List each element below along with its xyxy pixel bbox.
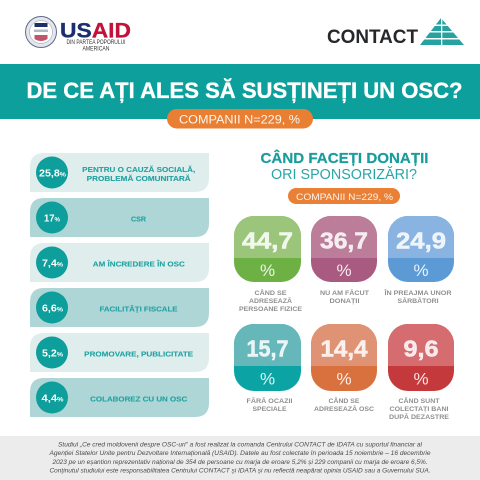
row: încredere: 7,4% xyxy=(42,258,63,270)
card: persoane fizice: % xyxy=(260,261,275,280)
row: colaborez: COLABOREZ CU UN OSC xyxy=(90,394,188,404)
heading: donations: ORI SPONSORIZĂRI? xyxy=(271,166,417,183)
card: după dezastre: 9,6 xyxy=(404,336,438,362)
row: colaborez xyxy=(30,378,209,417)
card: după dezastre xyxy=(388,324,454,421)
card: persoane fizice: 44,7 xyxy=(242,228,293,254)
row: facilități fiscale: 6,6% xyxy=(42,304,63,314)
panel: donation cards xyxy=(234,216,454,421)
row: CSR xyxy=(30,198,209,237)
row: promovare xyxy=(30,333,209,372)
card: nu am făcut donații: NU AM FĂCUT xyxy=(320,288,370,297)
USAID wordmark: USAID xyxy=(60,20,131,42)
footer note xyxy=(0,436,480,480)
card: după dezastre: % xyxy=(413,370,429,388)
row: CSR: CSR xyxy=(131,214,147,224)
card: sărbători xyxy=(383,216,454,305)
footer note: Agenției Statelor Unite pentru Dezvoltare Internațională (USAID). Datele au fost colectate în perioada 15 noiembrie – 16 decembrie xyxy=(48,450,431,457)
sample badge: donations xyxy=(288,188,400,204)
title band xyxy=(0,64,480,119)
icon: USAID seal xyxy=(26,16,56,48)
card: după dezastre: CÂND SUNT xyxy=(398,396,440,405)
card: nu am făcut donații: % xyxy=(336,261,352,280)
logo: USAID xyxy=(26,16,131,52)
footer note: Studiul „Ce cred moldovenii despre OSC-uri” a fost realizat la comanda Centrului CONTACT de IDATA cu suportul financiar al xyxy=(58,442,423,448)
USAID tagline: AMERICAN xyxy=(82,46,110,52)
heading: donations: CÂND FACEȚI DONAȚII xyxy=(260,149,428,167)
row: colaborez: 4,4 % xyxy=(42,394,64,404)
card: fără ocazii speciale: % xyxy=(260,370,275,388)
card: nu am făcut donații xyxy=(311,216,377,305)
card: persoane fizice xyxy=(234,216,302,313)
logo: CONTACT xyxy=(327,17,470,48)
sample badge: donations: COMPANII N=229, % xyxy=(296,192,393,202)
card: nu am făcut donații: DONAȚII xyxy=(330,298,360,305)
card: când se adresează OSC: CÂND SE xyxy=(328,396,360,405)
card: nu am făcut donații: 36,7 xyxy=(320,228,368,254)
card: sărbători: 24,9 xyxy=(396,228,446,254)
icon: pyramid xyxy=(418,17,470,46)
USAID tagline xyxy=(66,40,126,52)
card: după dezastre: DUPĂ DEZASTRE xyxy=(389,412,449,421)
row: cauză socială: 25,8% xyxy=(39,168,66,180)
row: cauză socială xyxy=(30,153,209,192)
card: persoane fizice: ADRESEAZĂ xyxy=(249,296,292,305)
row: facilități fiscale xyxy=(30,288,209,327)
CONTACT wordmark: CONTACT xyxy=(327,26,418,48)
sample badge: main: COMPANII N=229, % xyxy=(179,114,300,126)
card: sărbători: % xyxy=(413,261,429,280)
row: facilități fiscale: FACILITĂȚI FISCALE xyxy=(100,304,178,314)
card: fără ocazii speciale: SPECIALE xyxy=(252,406,287,413)
card: când se adresează OSC: 14,4 xyxy=(320,336,368,362)
footer note: Conținutul studiului este responsabilitatea Centrului CONTACT și IDATA și nu reflectă neapărat opinia USAID sau a Guvernului SUA. xyxy=(50,468,430,474)
row: cauză socială: PENTRU O CAUZĂ SOCIALĂ, xyxy=(82,165,195,174)
footer note: 2023 pe un eșantion reprezentativ național de 354 de persoane cu marja de eroare 5,2% și 229 companii cu marja de eroare 6,5%. xyxy=(51,459,428,466)
card: fără ocazii speciale: 15,7 xyxy=(246,336,288,362)
card: sărbători: ÎN PREAJMA UNOR xyxy=(383,288,452,297)
card: fără ocazii speciale: FĂRĂ OCAZII xyxy=(246,396,293,405)
row: promovare: 5,2% xyxy=(42,348,63,360)
card: când se adresează OSC: % xyxy=(336,370,352,388)
card: după dezastre: COLECTAȚI BANI xyxy=(390,406,449,413)
USAID tagline: DIN PARTEA POPORULUI xyxy=(66,40,126,46)
card: când se adresează OSC: ADRESEAZĂ OSC xyxy=(314,404,374,413)
panel: reasons list xyxy=(30,153,209,417)
title: DE CE AȚI ALES SĂ SUSȚINEȚI UN OSC? xyxy=(26,78,462,103)
row: încredere: AM ÎNCREDERE ÎN OSC xyxy=(93,260,185,268)
row: promovare: PROMOVARE, PUBLICITATE xyxy=(84,350,193,358)
card: fără ocazii speciale xyxy=(234,324,301,413)
row: încredere xyxy=(30,243,209,282)
card: când se adresează OSC xyxy=(311,324,377,413)
sample badge: main xyxy=(167,109,313,128)
card: persoane fizice: CÂND SE xyxy=(254,288,287,297)
row: cauză socială: PROBLEMĂ COMUNITARĂ xyxy=(87,174,191,183)
row: CSR: 17% xyxy=(44,214,60,224)
card: persoane fizice: PERSOANE FIZICE xyxy=(239,306,302,313)
heading: donations xyxy=(260,149,428,183)
card: sărbători: SĂRBĂTORI xyxy=(398,296,439,305)
